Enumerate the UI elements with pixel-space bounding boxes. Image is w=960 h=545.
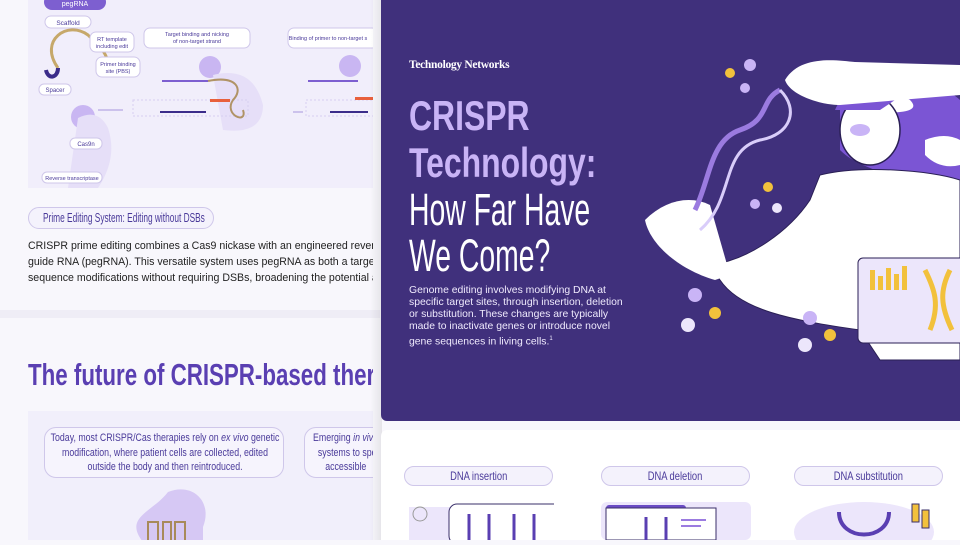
panel: prime editing diagram: Primer binding [100,62,136,68]
scaffold label [45,16,91,28]
panel: prime editing diagram: including edit [96,44,129,50]
title: CRISPR [409,92,530,139]
panel: prime editing diagram: Target binding and nicking [165,32,229,38]
callout: ex vivo: Today, most CRISPR/Cas therapies rely on ex vivo genetic modification, where patient cells are collected, edited outside the body and then reintroduced. [51,432,279,473]
title: How Far Have [409,184,590,235]
panel: prime editing diagram: RT template [97,37,127,43]
divider band [0,310,380,318]
panel: prime editing diagram: Reverse transcriptase [45,176,99,182]
pill: DNA deletion [601,466,750,486]
pill: DNA insertion [404,466,553,486]
scaffold label: Scaffold [56,20,80,27]
pill: prime editing heading: Prime Editing System: Editing without DSBs [43,210,205,225]
panel: prime editing diagram: of non-target strand [173,39,221,45]
panel: prime editing diagram: Binding of primer to non-target s [289,36,368,42]
text block: intro: Genome editing involves modifying DNA at specific target sites, through insertion, deletion or substitution. These changes are typically made to inactivate genes or introduce novel gene sequences in living cells.1 [409,285,623,347]
pegRNA label: pegRNA [62,1,89,8]
icon: insertion [409,504,554,540]
callout: in vivo: accessible [325,461,366,473]
panel: prime editing diagram: Spacer [45,88,65,94]
callout: in vivo [304,427,424,478]
pill: DNA deletion: DNA deletion [648,469,703,483]
pill: prime editing heading [28,207,214,229]
pegRNA label [44,0,106,10]
pill: DNA substitution [794,466,943,486]
illustration: scientist with DNA [645,59,960,360]
icon: deletion [601,502,751,540]
icon: substitution [794,502,934,540]
icon: blob with DNA [136,489,206,540]
title: We Come? [409,230,550,281]
panel: prime editing diagram: site (PBS) [106,69,131,75]
title: Technology: [409,139,596,186]
logo: Technology Networks [409,59,509,71]
text block: prime editing description [28,240,373,284]
panel: prime editing diagram [28,0,373,188]
panel: editing types [381,430,960,540]
pill: DNA insertion: DNA insertion [450,469,507,483]
panel: prime editing diagram: Cas9n [77,142,95,148]
pill: DNA substitution: DNA substitution [834,469,903,483]
panel: future therapies [28,411,373,540]
title [409,92,596,281]
shadow [370,0,382,540]
panel: cover [381,0,960,421]
